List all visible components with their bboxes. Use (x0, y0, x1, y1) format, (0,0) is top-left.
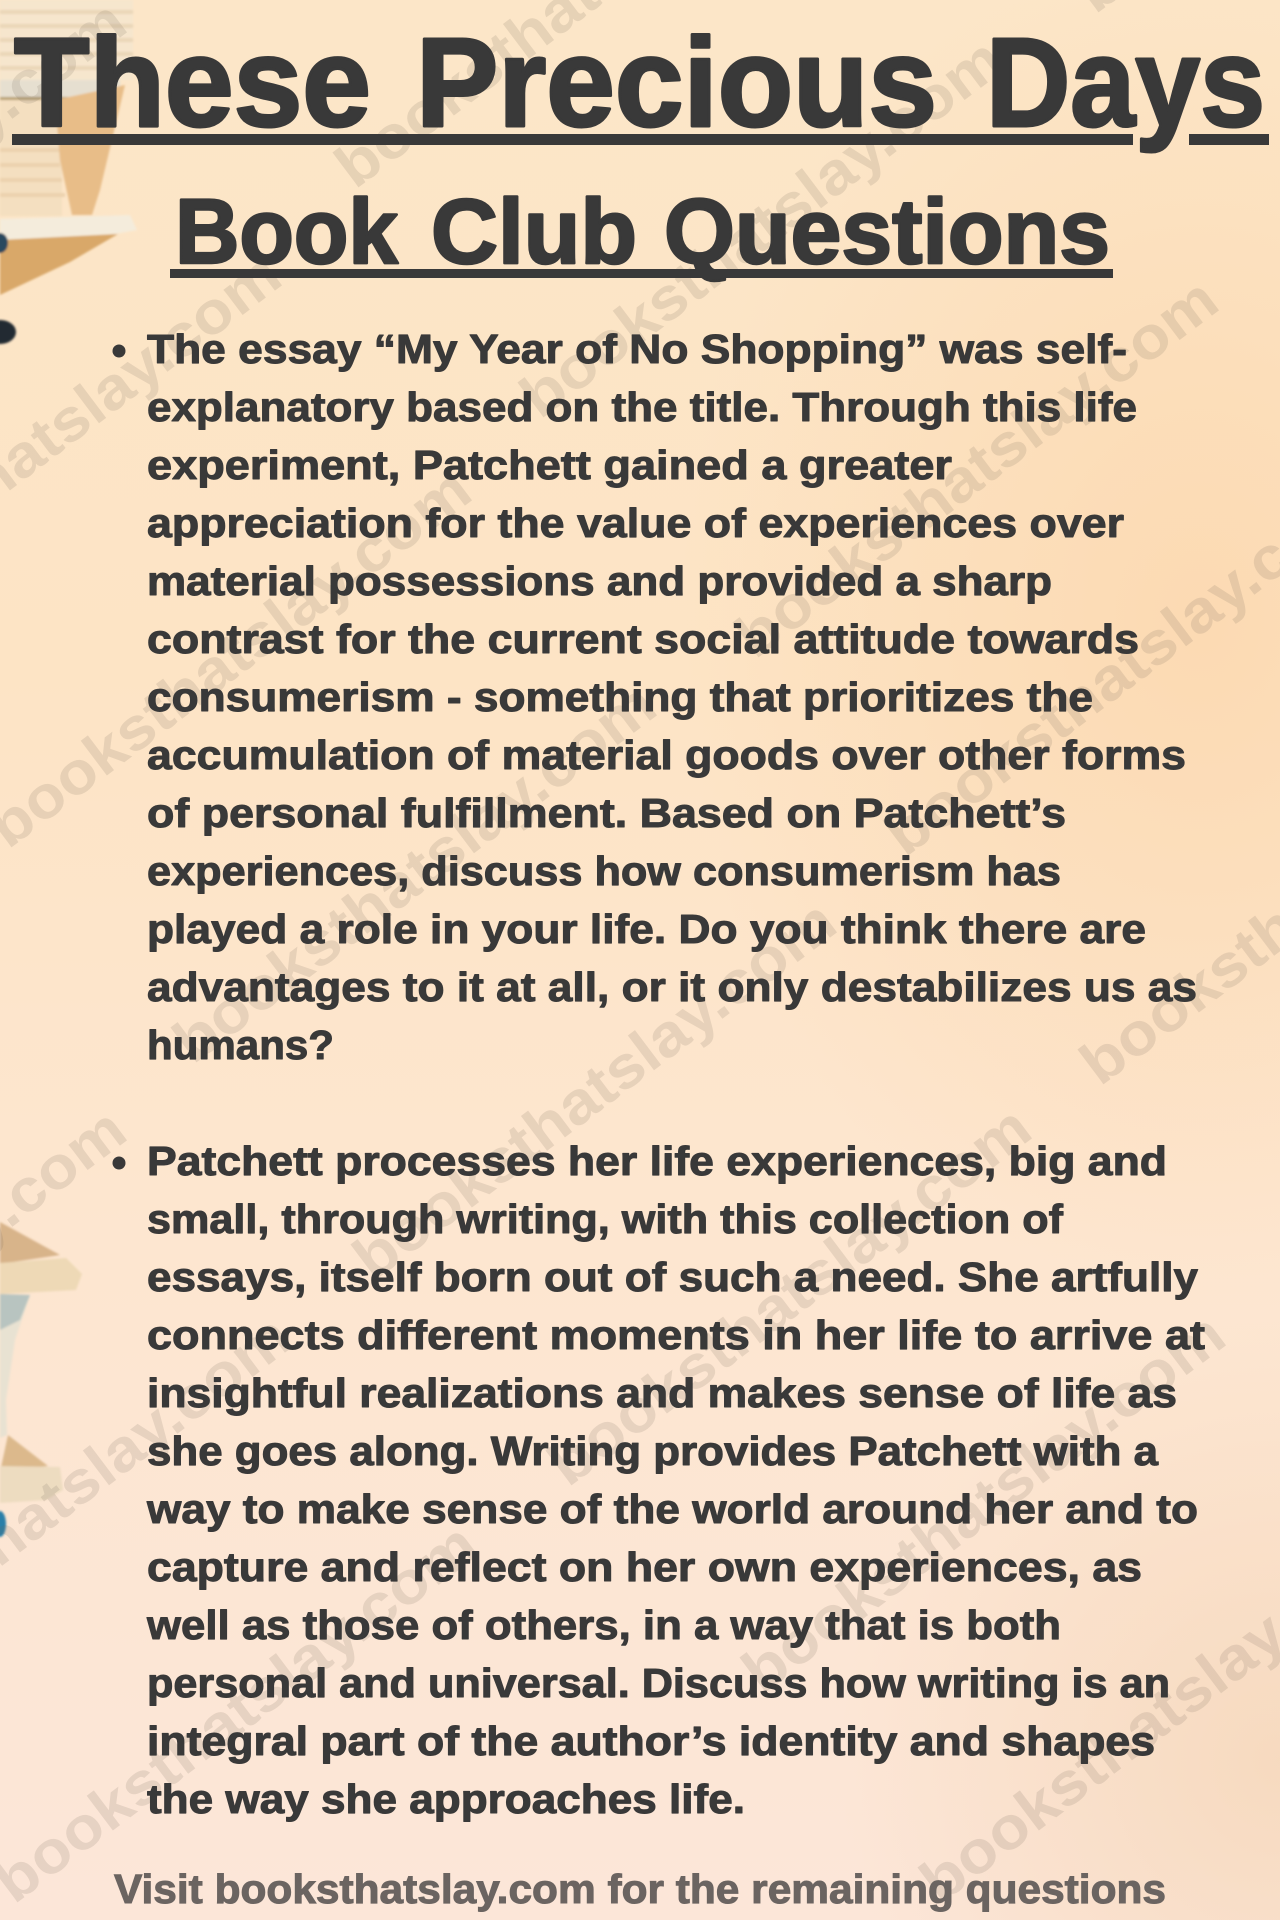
watermarks: booksthatslay.com (536, 1093, 1043, 1498)
bullet 2 (112, 1156, 126, 1170)
question 1 (112, 326, 1197, 1068)
question 2 text: way to make sense of the world around her and to (146, 1486, 1198, 1532)
watermarks: booksthatslay.com (341, 887, 848, 1292)
question 2 text: small, through writing, with this collection of (147, 1196, 1063, 1242)
question 1 text: material possessions and provided a sharp (147, 558, 1052, 604)
question 1 text: humans? (147, 1022, 334, 1068)
question 2 text: capture and reflect on her own experiences, as (147, 1544, 1142, 1590)
question 2 (112, 1138, 1205, 1822)
question 1 text (147, 326, 1197, 1068)
title: These (14, 12, 371, 153)
question 2 text: essays, itself born out of such a need. She artfully (147, 1254, 1198, 1300)
watermarks: booksthatslay.com (723, 265, 1230, 670)
subtitle: Questions (664, 181, 1110, 283)
question 2 text: she goes along. Writing provides Patchett with a (147, 1428, 1159, 1474)
question 2 text (146, 1138, 1205, 1822)
question 2 text: integral part of the author’s identity and shapes (147, 1718, 1155, 1764)
question 2 text: well as those of others, in a way that is both (146, 1602, 1061, 1648)
question 1 text: accumulation of material goods over other forms (147, 732, 1186, 778)
question 1 text: The essay “My Year of No Shopping” was self- (147, 326, 1127, 372)
question 2 text: insightful realizations and makes sense of life as (147, 1370, 1177, 1416)
question 2 text: Patchett processes her life experiences, big and (147, 1138, 1167, 1184)
watermarks: booksthatslay.com (508, 25, 1015, 430)
question 1 text: consumerism - something that prioritizes the (147, 674, 1093, 720)
subtitle: Book (175, 181, 399, 283)
question 1 text: advantages to it at all, or it only destabilizes us as (147, 964, 1197, 1010)
subtitle (170, 181, 1113, 283)
book stack: middle left (0, 1222, 82, 1537)
watermarks: booksthatslay.com (730, 1300, 1237, 1705)
question 1 text: experiences, discuss how consumerism has (147, 848, 1061, 894)
question 1 text: contrast for the current social attitude towards (147, 616, 1139, 662)
question 1 text: experiment, Patchett gained a greater (147, 442, 952, 488)
question 2 text: connects different moments in her life to arrive at (147, 1312, 1205, 1358)
question 2 text: the way she approaches life. (147, 1776, 745, 1822)
question 1 text: played a role in your life. Do you think there are (147, 906, 1146, 952)
title: Precious (416, 12, 937, 153)
book stack: top left (0, 0, 137, 344)
question 2 text: personal and universal. Discuss how writing is an (147, 1660, 1170, 1706)
bullet 1 (112, 344, 126, 358)
subtitle: Club (431, 181, 637, 283)
title (12, 12, 1269, 153)
title: Days (986, 12, 1265, 153)
footer call to action: Visit booksthatslay.com for the remaining questions (114, 1866, 1166, 1912)
question 1 text: explanatory based on the title. Through this life (147, 384, 1137, 430)
question 1 text: of personal fulfillment. Based on Patchett’s (147, 790, 1066, 836)
question 1 text: appreciation for the value of experiences over (147, 500, 1124, 546)
watermarks: booksthatslay.com (161, 670, 668, 1075)
